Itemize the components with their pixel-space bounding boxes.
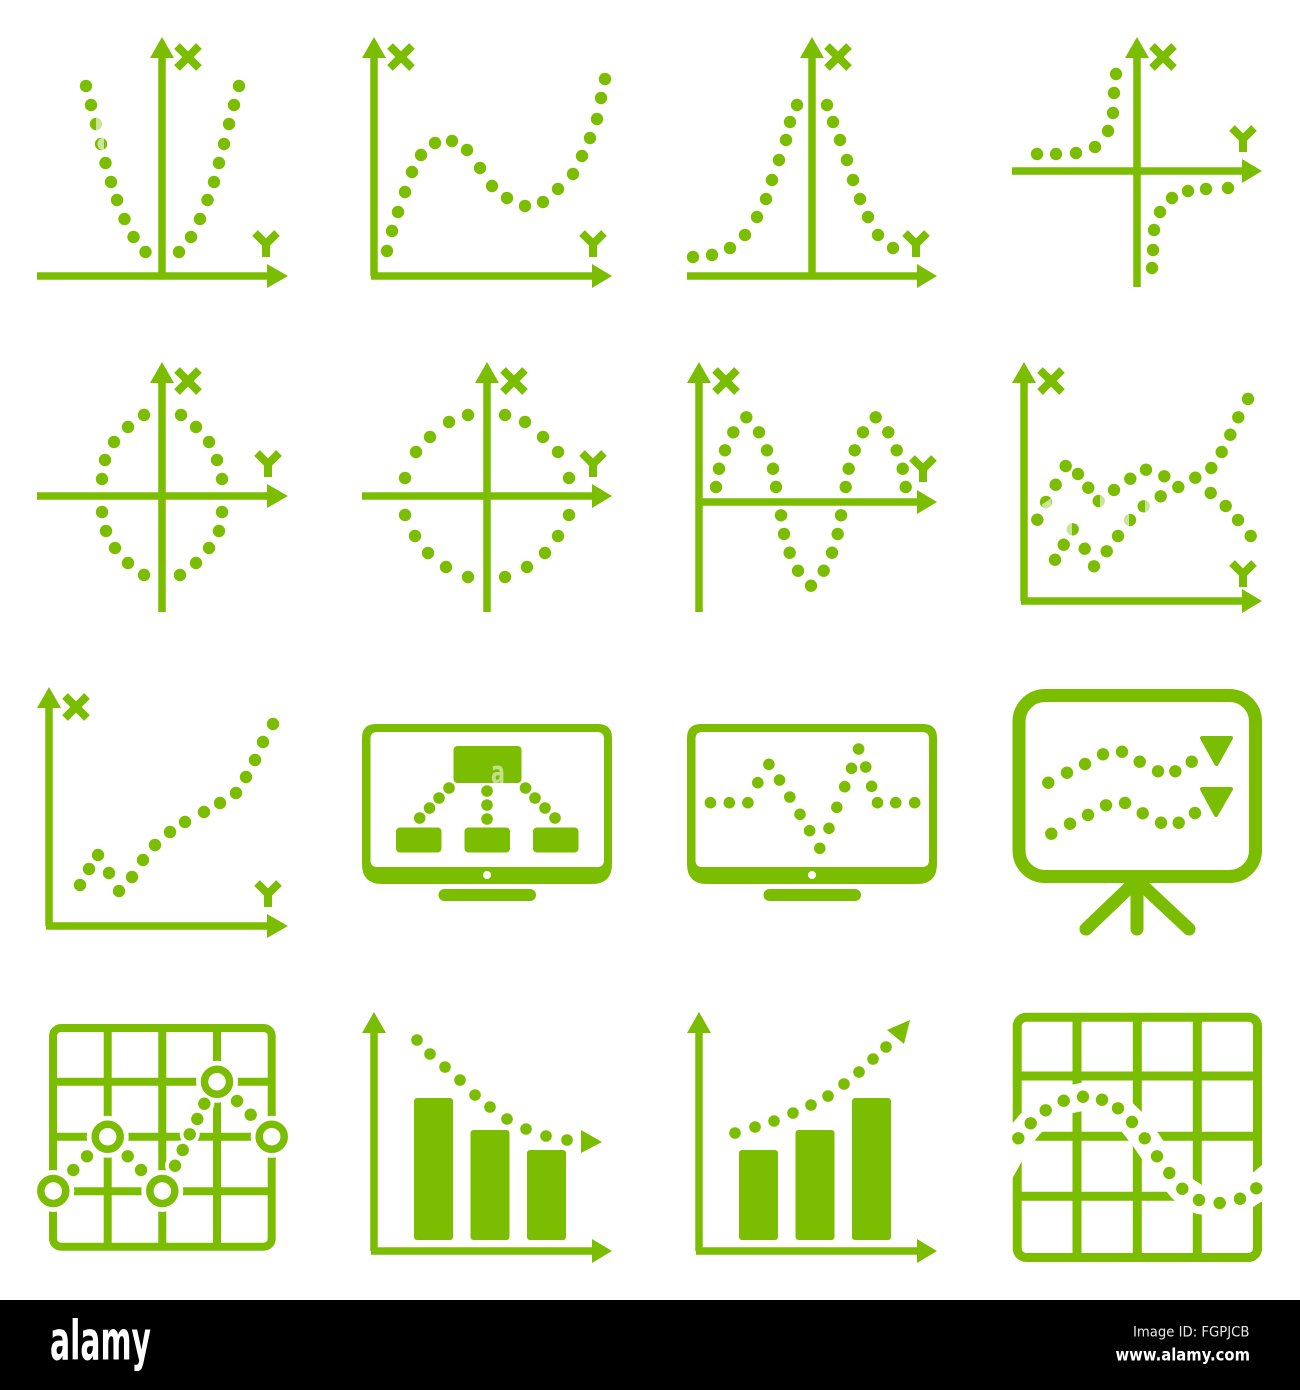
icon: hyperbola plot — [1012, 37, 1262, 287]
icon: circle plot — [362, 362, 612, 612]
footer bar — [0, 1300, 1300, 1390]
icon: two series plot — [1012, 362, 1262, 613]
icon: vertical ellipse plot — [37, 362, 288, 612]
image id: Image ID: FGPJCB — [1133, 1325, 1250, 1341]
alamy logo: alamy — [50, 1310, 151, 1372]
icon: bell curve plot — [687, 37, 937, 288]
icon: grid with ring markers — [32, 1028, 293, 1247]
icon: rising curve plot — [37, 687, 288, 938]
icon: sine wave plot — [687, 362, 937, 612]
icon: grid with dotted wave — [1000, 1017, 1280, 1258]
icon: parabola plot — [37, 37, 288, 288]
icon: monitor with hierarchy — [362, 724, 612, 901]
icon: monitor with hierarchy: a — [491, 755, 505, 791]
icon: rising bar chart — [687, 1012, 937, 1263]
icon: cubic curve plot — [362, 37, 612, 288]
website: www.alamy.com — [1116, 1346, 1250, 1366]
icon: monitor with dotted wave — [687, 724, 937, 901]
icon: falling bar chart — [362, 1012, 612, 1263]
icon: presentation board with two trends — [1019, 696, 1256, 929]
